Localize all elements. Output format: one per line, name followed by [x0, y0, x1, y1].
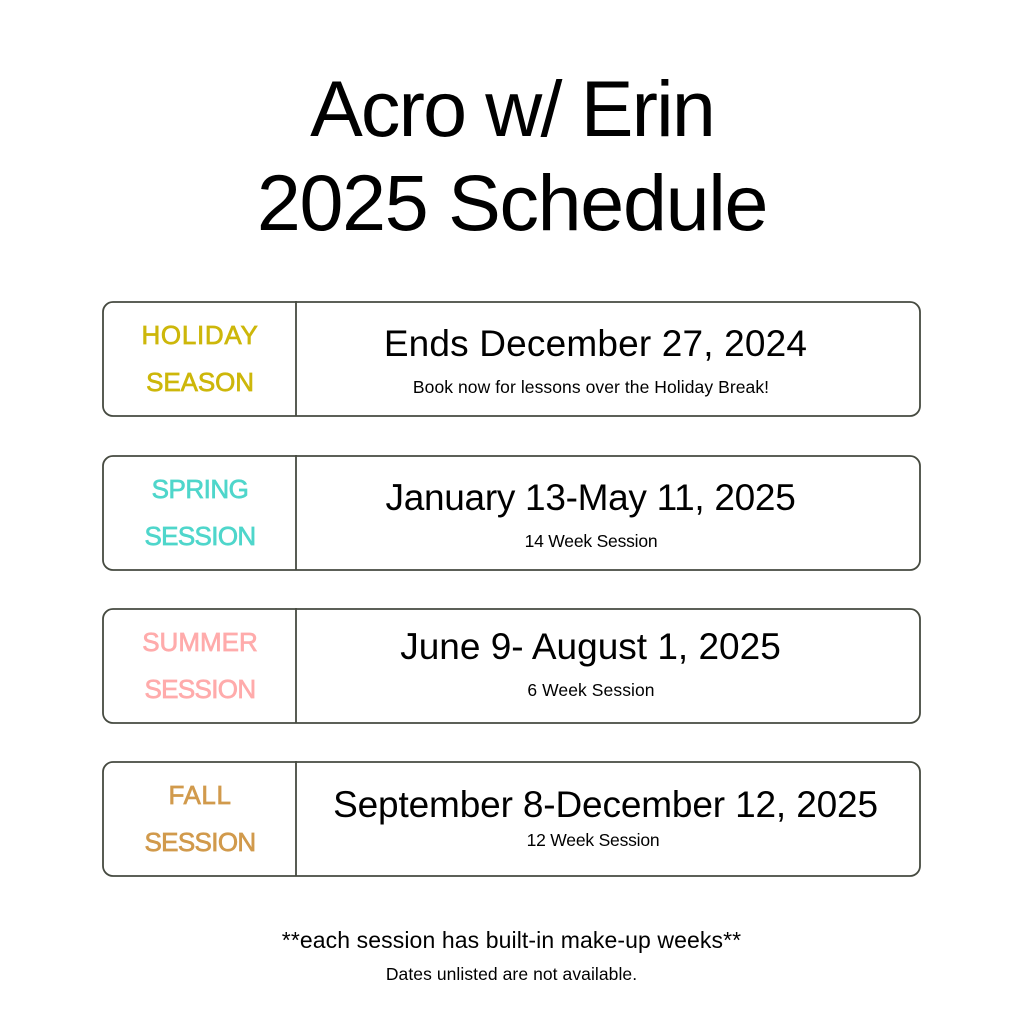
summer note: 6 Week Session — [527, 680, 655, 700]
panel: summer session — [102, 608, 921, 724]
panel: spring session — [102, 455, 921, 571]
disclaimer: Dates unlisted are not available. — [386, 964, 637, 984]
summer label: SUMMER — [142, 626, 258, 656]
summer dates: June 9- August 1, 2025 — [400, 626, 781, 667]
spring dates: January 13-May 11, 2025 — [386, 477, 795, 518]
fall note: 12 Week Session — [527, 830, 659, 850]
footnote: **each session has built-in make-up weeks** — [282, 927, 741, 953]
holiday dates: Ends December 27, 2024 — [384, 323, 807, 364]
summer label — [142, 626, 258, 704]
fall label: SESSION — [144, 826, 256, 856]
spring label — [144, 474, 256, 550]
title: 2025 Schedule — [257, 158, 767, 247]
holiday note: Book now for lessons over the Holiday Break! — [413, 377, 769, 397]
holiday label — [141, 320, 259, 396]
fall label: FALL — [168, 780, 232, 810]
spring note: 14 Week Session — [525, 531, 657, 551]
title — [257, 64, 767, 247]
title: Acro w/ Erin — [310, 64, 714, 153]
spring label: SPRING — [152, 474, 248, 504]
summer label: SESSION — [144, 674, 256, 704]
fall label — [144, 780, 256, 856]
spring label: SESSION — [144, 520, 256, 550]
holiday label: HOLIDAY — [141, 320, 259, 350]
panel: holiday season — [102, 301, 921, 417]
holiday label: SEASON — [146, 366, 254, 396]
fall dates: September 8-December 12, 2025 — [333, 784, 878, 825]
panel: fall session — [102, 761, 921, 877]
